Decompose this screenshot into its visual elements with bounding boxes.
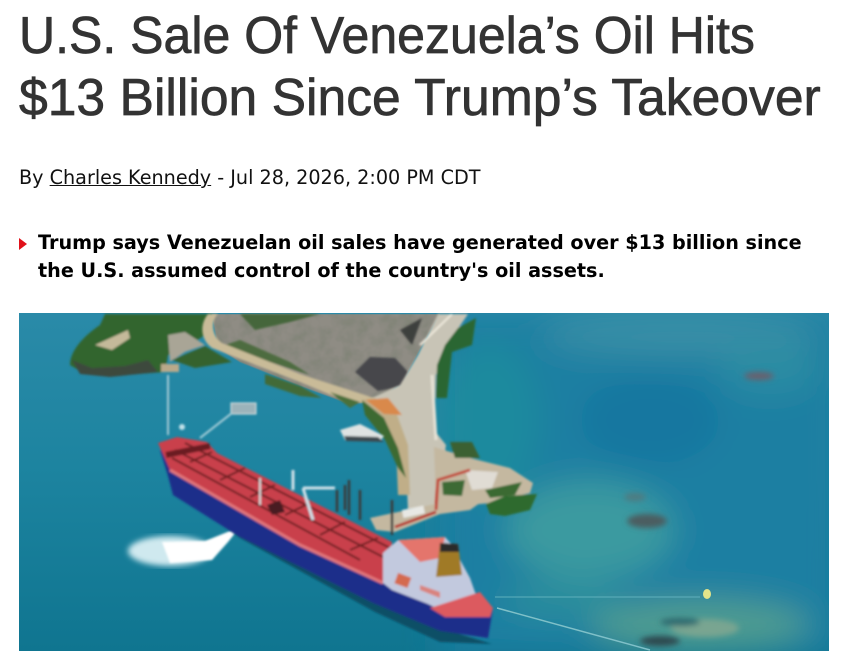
superstructure [383, 537, 476, 610]
title [19, 7, 821, 127]
byline: By Charles Kennedy - Jul 28, 2026, 2:00 PM CDT [19, 166, 480, 189]
land: lower pier and garden [337, 442, 537, 535]
deck edge [170, 470, 383, 583]
oil tanker [158, 424, 493, 644]
title: U.S. Sale Of Venezuela’s Oil Hits [19, 7, 755, 65]
land: left headland [70, 314, 232, 377]
deck pipes [172, 443, 390, 560]
funnel [436, 543, 462, 577]
mooring buoy and lines [495, 589, 711, 650]
deck [158, 437, 392, 583]
summary text [38, 231, 802, 282]
ship shadow [172, 490, 492, 644]
land: road and causeway [362, 314, 476, 510]
summary text: the U.S. assumed control of the country's oil assets. [38, 259, 605, 282]
photo: oil tanker at a Venezuelan terminal [19, 313, 829, 651]
stern deck [430, 592, 493, 617]
water spray [128, 527, 240, 566]
summary bullet [19, 231, 802, 282]
icon: red triangle bullet [19, 238, 27, 250]
land: rocky hill [202, 314, 440, 408]
summary text: Trump says Venezuelan oil sales have generated over $13 billion since [38, 231, 802, 254]
water [19, 313, 840, 653]
shore path [202, 314, 384, 403]
moored boats [168, 375, 384, 442]
title: $13 Billion Since Trump’s Takeover [19, 69, 821, 127]
hull [160, 450, 493, 638]
